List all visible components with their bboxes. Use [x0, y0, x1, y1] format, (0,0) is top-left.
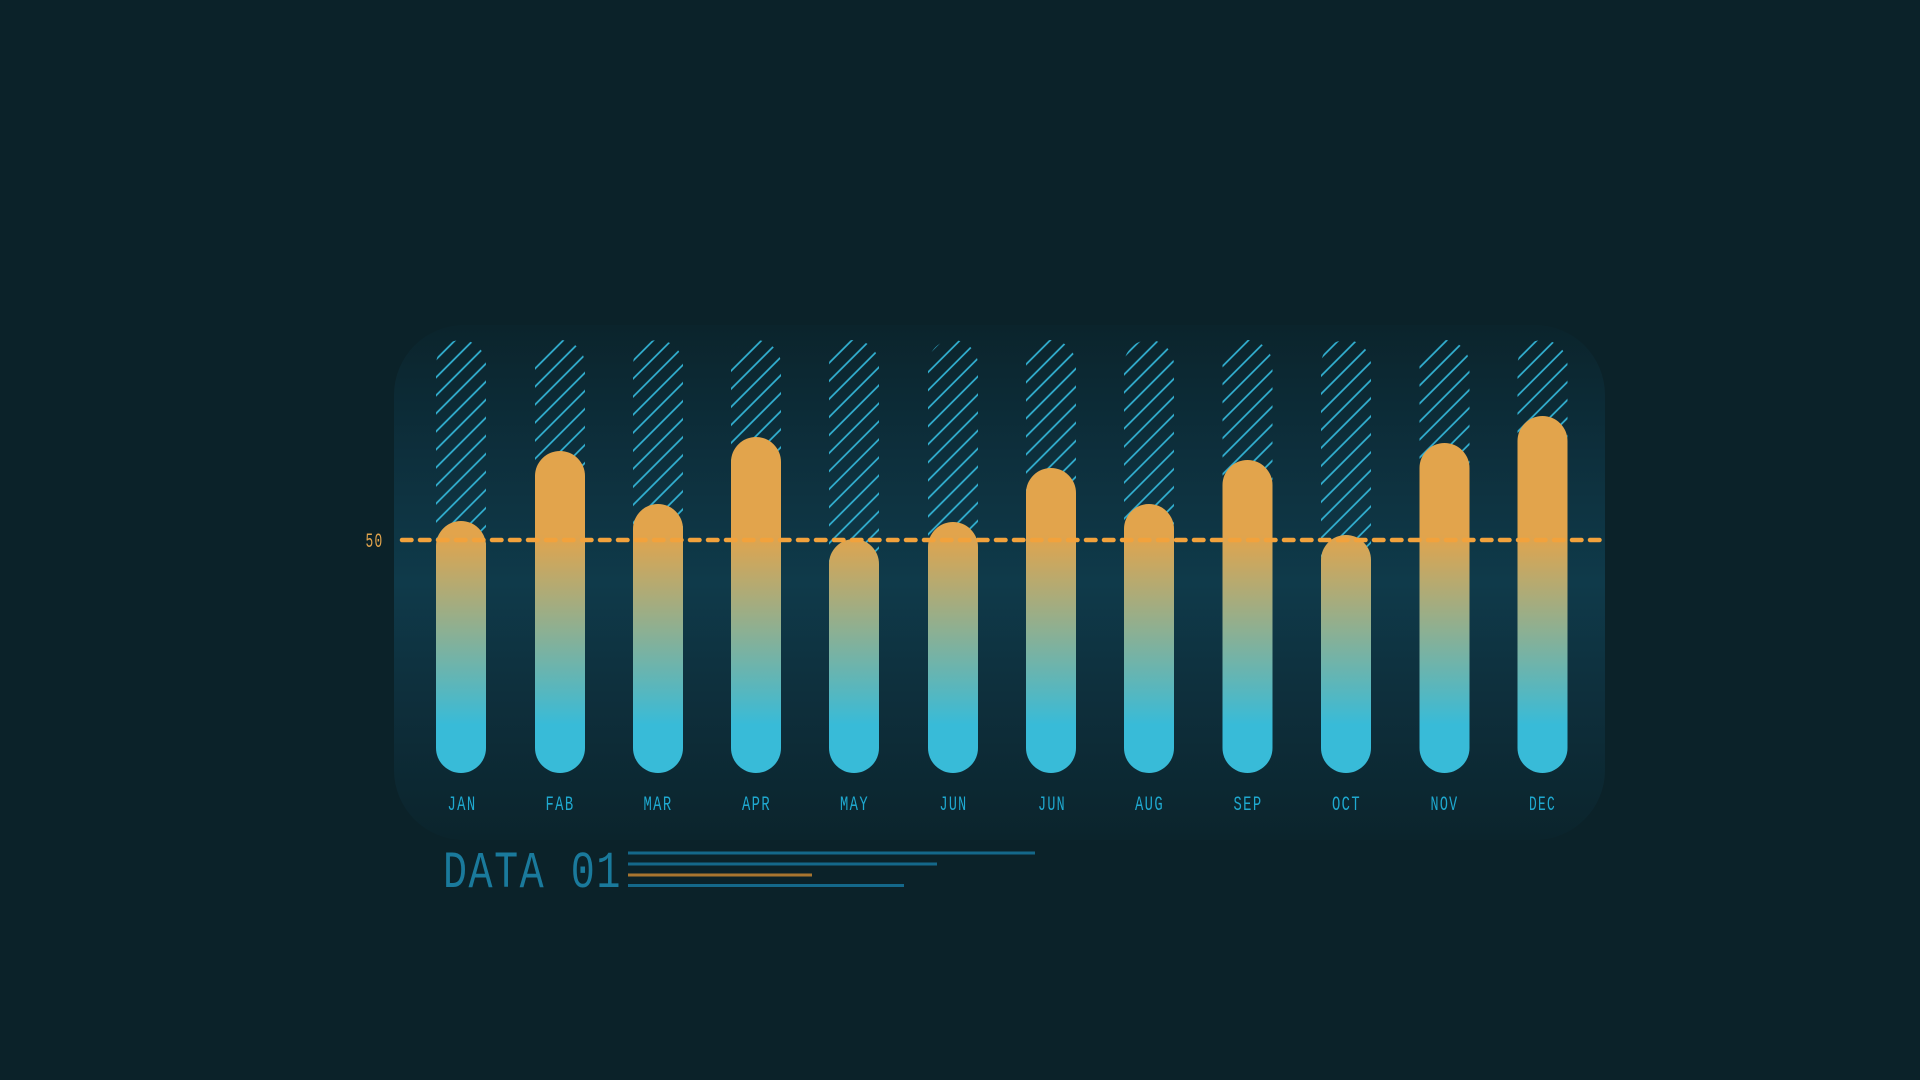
column: APR: APR	[742, 794, 771, 817]
axis label: 50: 50	[366, 531, 384, 554]
column: DEC: DEC	[1529, 794, 1556, 817]
column: APR	[731, 340, 781, 817]
column: JUN second: JUN	[1038, 794, 1066, 817]
column: JAN: JAN	[448, 794, 476, 817]
column: JUN	[928, 340, 978, 817]
column: MAR	[633, 340, 683, 817]
column: OCT	[1321, 340, 1371, 817]
title: DATA 01: DATA 01	[443, 843, 622, 903]
column: SEP	[1222, 340, 1272, 817]
column: OCT: OCT	[1332, 794, 1361, 817]
column: MAY: MAY	[840, 794, 869, 817]
column: NOV	[1420, 340, 1470, 817]
column: FAB: FAB	[546, 794, 574, 817]
panel: chart background	[394, 325, 1605, 840]
column: SEP: SEP	[1234, 794, 1262, 817]
column: MAY	[829, 340, 879, 817]
column: MAR: MAR	[644, 794, 672, 817]
legend lines	[628, 852, 1035, 887]
threshold line: 50	[402, 538, 1600, 542]
column: AUG	[1124, 340, 1174, 817]
column: FAB	[535, 340, 585, 817]
column: DEC	[1518, 340, 1568, 817]
column: JAN	[436, 340, 486, 817]
column: AUG: AUG	[1135, 794, 1164, 817]
column: JUN second	[1026, 340, 1076, 817]
column: JUN: JUN	[940, 794, 968, 817]
column: NOV: NOV	[1430, 794, 1458, 817]
